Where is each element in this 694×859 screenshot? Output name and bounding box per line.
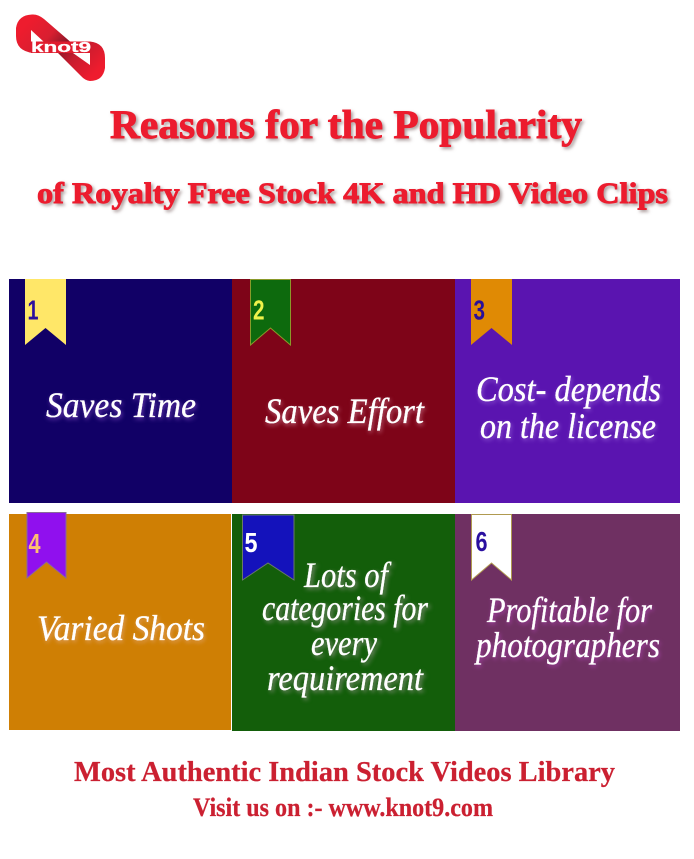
logo: knot9 [16, 14, 105, 81]
panel 6: profitable for photographers [455, 514, 680, 731]
footer tagline: Most Authentic Indian Stock Videos Library [74, 756, 615, 788]
panel 6: profitable for photographers: 6 [476, 526, 488, 557]
panel 1: saves time [9, 279, 232, 503]
panel 2: saves effort: Saves Effort [265, 391, 425, 431]
panel 4: varied shots: Varied Shots [37, 608, 205, 648]
panel 3: cost: 3 [474, 294, 485, 326]
panel 5: lots of categories: requirement [267, 658, 424, 698]
panel 3: cost [455, 279, 680, 503]
panel 5: lots of categories: categories for [262, 588, 429, 628]
panel 4: varied shots: 4 [28, 528, 41, 559]
panel 1: saves time: 1 [28, 294, 38, 326]
panel 6: profitable for photographers: photographers [473, 625, 660, 665]
panel 1: saves time: Saves Time [46, 385, 196, 425]
logo: knot9: knot9 [31, 39, 91, 56]
panel 5: lots of categories [232, 514, 455, 731]
panel 5: lots of categories: Lots of [303, 555, 392, 595]
title line 2: of Royalty Free Stock 4K and HD Video Clips [37, 177, 668, 210]
title line 1: Reasons for the Popularity [110, 102, 582, 147]
footer website link: Visit us on :- www.knot9.com [193, 793, 493, 822]
panel 3: cost: on the license [480, 406, 656, 446]
panel 4: varied shots [9, 512, 231, 730]
panel 3: cost: Cost- depends [476, 369, 661, 409]
panel 5: lots of categories: every [311, 623, 377, 663]
panel 5: lots of categories: 5 [244, 527, 258, 558]
panel 2: saves effort: 2 [253, 294, 264, 326]
panel 2: saves effort [232, 279, 455, 503]
panel 6: profitable for photographers: Profitable for [486, 590, 653, 630]
